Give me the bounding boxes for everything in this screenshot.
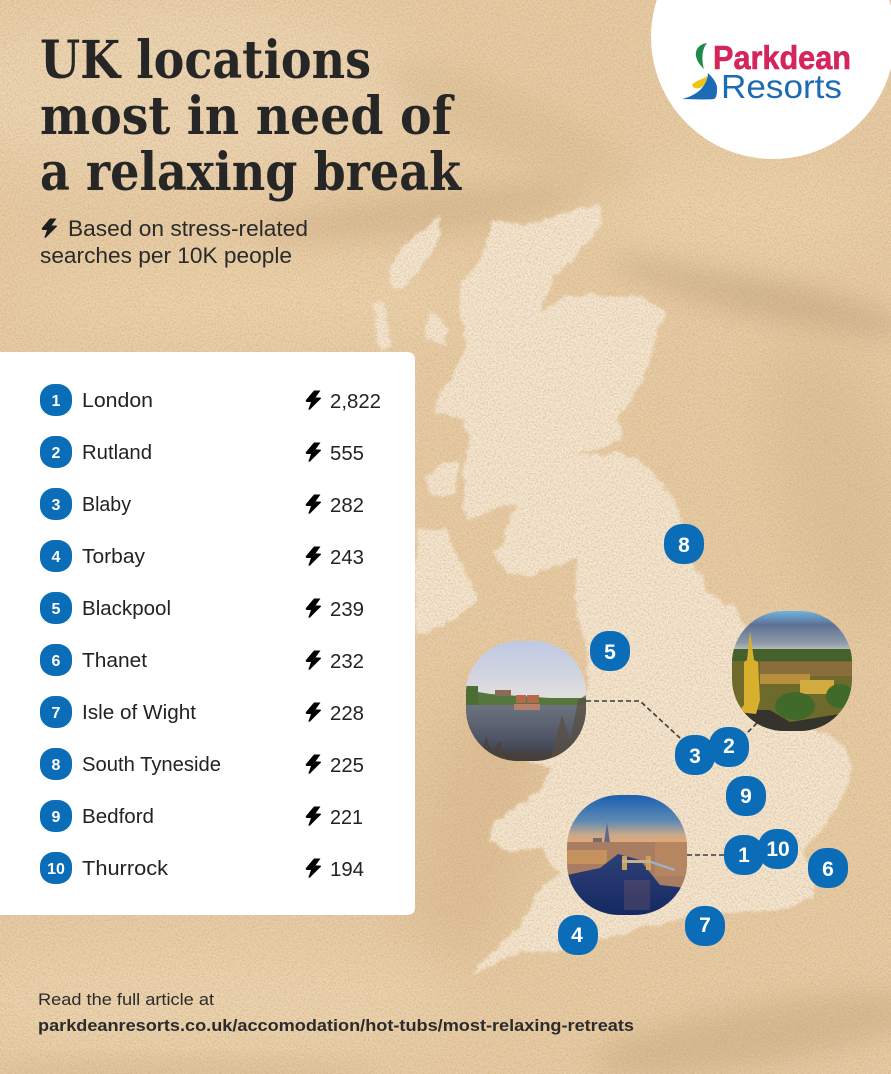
map marker: 8 South Tyneside [664,524,704,564]
row: Bedford: Bedford [82,806,154,828]
title: UK locations [40,30,371,91]
map marker: 5 Blackpool: 5 [604,641,616,664]
row: London: London [82,390,153,412]
row: South Tyneside: 8 [52,757,61,774]
row: Rutland: Rutland [82,442,152,464]
footer source text: parkdeanresorts.co.uk/accomodation/hot-tubs/most-relaxing-retreats [38,1016,634,1035]
subtitle: searches per 10K people [40,243,292,268]
row: Bedford [40,800,363,832]
logo panel [651,0,891,159]
Scotland, England and Wales [433,203,852,976]
photo: lake at Blaby [466,641,586,761]
map marker: 5 Blackpool [590,631,630,671]
row: Isle of Wight [40,696,364,728]
row: South Tyneside [40,748,364,780]
photo: Oakham church in Rutland [732,611,854,731]
row: Thanet: Thanet [82,650,147,672]
map marker: 6 Thanet: 6 [822,858,834,881]
photo: Tower Bridge, London [567,795,687,915]
map of the UK in pale sand [374,203,852,976]
map marker: 7 Isle of Wight [685,906,725,946]
map marker: 4 Torbay [558,915,598,955]
row: Thanet: 232 [330,651,364,673]
row: Blaby [40,488,364,520]
row: South Tyneside: South Tyneside [82,754,221,776]
row: Blackpool: Blackpool [82,598,171,620]
row: London: 2,822 [330,391,381,413]
icon: lightning bolt [42,218,57,238]
row: Blaby: 3 [52,497,61,514]
row: Rutland: 555 [330,443,364,465]
row: Torbay: 243 [330,547,364,569]
row: Torbay: 4 [52,549,61,566]
map marker: 10 Thurrock: 10 [766,838,790,861]
map marker: 9 Bedford [726,776,766,816]
row: Bedford: 9 [52,809,61,826]
row: Rutland [40,436,364,468]
row: Blaby: Blaby [82,494,131,516]
row: South Tyneside: 225 [330,755,364,777]
subtitle: Based on stress-related [68,216,308,241]
row: Isle of Wight: 228 [330,703,364,725]
row: Isle of Wight: 7 [52,705,61,722]
map marker: 3 Blaby: 3 [689,745,701,768]
logo: Parkdean Resorts: Resorts [721,68,842,105]
row: London [40,384,381,416]
map marker: 4 Torbay: 4 [571,924,583,947]
panel: ranking list [0,352,415,915]
row: Blackpool [40,592,364,624]
title: a relaxing break [40,142,462,203]
footer source text [38,990,634,1035]
Outer Hebrides [390,217,441,292]
row: Blackpool: 239 [330,599,364,621]
map marker: 8 South Tyneside: 8 [678,534,690,557]
row: Blaby: 282 [330,495,364,517]
map marker: 9 Bedford: 9 [740,785,752,808]
row: Thurrock: 194 [330,859,364,881]
title: most in need of [40,86,455,147]
row: London: 1 [52,393,61,410]
row: Thurrock [40,852,364,884]
row: Thurrock: Thurrock [82,858,169,880]
title [40,30,462,203]
subtitle [40,216,308,268]
map marker: 6 Thanet [808,848,848,888]
map marker: 10 Thurrock [758,829,798,869]
map marker: 1 London [724,835,764,875]
map marker: 2 Rutland [709,727,749,767]
Inner islands [425,310,450,345]
row: Thanet: 6 [52,653,61,670]
row: Torbay: Torbay [82,546,145,568]
connector lines [586,701,757,855]
row: Bedford: 221 [330,807,363,829]
row: Rutland: 2 [52,445,61,462]
map marker: 2 Rutland: 2 [723,735,735,758]
row: Isle of Wight: Isle of Wight [82,702,196,724]
map marker: 1 London: 1 [738,844,750,867]
row: Thurrock: 10 [47,861,65,878]
footer source text: Read the full article at [38,990,214,1009]
logo: Parkdean Resorts: Parkdean [713,39,851,76]
row: Thanet [40,644,364,676]
map marker: 3 Blaby [675,735,715,775]
row: Blackpool: 5 [52,601,61,618]
Northern Ireland [415,528,477,636]
logo: Parkdean Resorts [682,39,851,105]
map marker: 7 Isle of Wight: 7 [699,914,711,937]
row: Torbay [40,540,364,572]
